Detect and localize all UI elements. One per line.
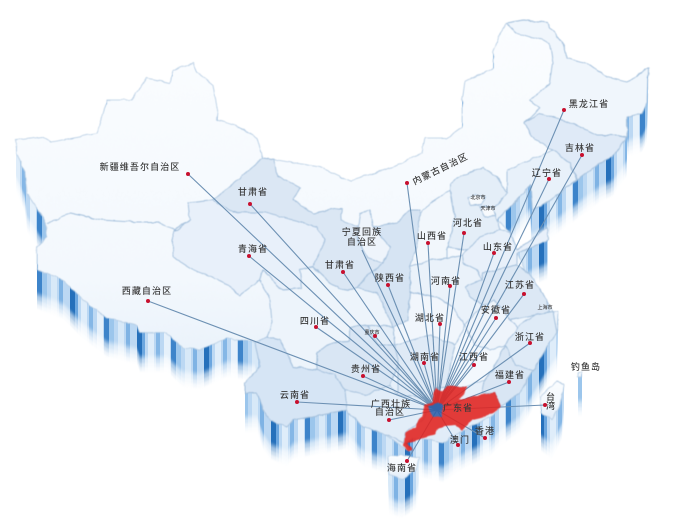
- Shaanxi: 陕西省: [375, 272, 405, 283]
- Shanxi: [417, 230, 447, 245]
- Qinghai: [238, 243, 268, 258]
- Fujian: 福建省: [495, 369, 525, 380]
- Heilongjiang: [562, 98, 609, 112]
- map surface with provinces: [16, 20, 648, 479]
- Taiwan: 台: [546, 391, 556, 402]
- Yunnan: [280, 389, 310, 404]
- Sichuan: 四川省: [300, 315, 330, 326]
- Anhui: 安徽省: [481, 304, 511, 315]
- Diaoyu Islands: 钓鱼岛: [571, 361, 601, 372]
- Jiangxi: 江西省: [459, 351, 489, 362]
- land surface: [16, 20, 648, 479]
- Hebei: 河北省: [453, 217, 483, 228]
- Guangdong highlighted in red, lines showing faintly through: [403, 386, 501, 452]
- Gansu: [238, 186, 268, 206]
- Gansu second label: [325, 259, 355, 274]
- Beijing: 北京市: [470, 194, 486, 201]
- Taiwan: [543, 391, 556, 411]
- Hubei: 湖北省: [415, 312, 445, 323]
- Jiangsu: 江苏省: [505, 279, 535, 290]
- Jilin: [565, 142, 595, 157]
- Shandong: 山东省: [483, 241, 513, 252]
- Hainan: 海南省: [387, 462, 417, 473]
- Liaoning: 辽宁省: [532, 167, 562, 178]
- provinces: [47, 20, 648, 442]
- hub marker: [428, 403, 443, 417]
- Chongqing: 重庆市: [364, 329, 380, 336]
- Anhui: [481, 304, 511, 320]
- Guizhou: 贵州省: [351, 363, 381, 374]
- Fujian: [495, 369, 525, 384]
- Ningxia: 自治区: [347, 236, 377, 247]
- Hebei: [453, 217, 483, 235]
- Guangdong: 广东省: [443, 402, 473, 413]
- Xinjiang: [100, 161, 190, 176]
- Hong Kong: [475, 425, 495, 440]
- Inner Mongolia: 内蒙古自治区: [411, 150, 470, 187]
- Heilongjiang: 黑龙江省: [569, 98, 609, 109]
- Chongqing: [364, 329, 380, 338]
- Taiwan: 湾: [546, 400, 556, 411]
- Tianjin: 天津市: [480, 205, 496, 212]
- Guangxi: 自治区: [375, 406, 405, 417]
- Gansu second label: 甘肃省: [325, 259, 355, 270]
- Qinghai: 青海省: [238, 243, 268, 254]
- Shanxi: 山西省: [417, 230, 447, 241]
- Guangxi: 广西壮族: [371, 398, 411, 409]
- Guangxi: [371, 398, 411, 422]
- Gansu: 甘肃省: [238, 186, 268, 197]
- Macau: 澳门: [450, 434, 470, 445]
- Tibet: [122, 285, 172, 303]
- Guangdong shape: [403, 386, 501, 452]
- Zhejiang: 浙江省: [515, 331, 545, 342]
- Henan: 河南省: [431, 275, 461, 286]
- Guizhou: [351, 363, 381, 378]
- Xinjiang: 新疆维吾尔自治区: [100, 161, 180, 172]
- Hong Kong: 香港: [475, 425, 495, 436]
- Shaanxi: [375, 272, 405, 287]
- Ningxia: [342, 226, 382, 247]
- province labels and markers: [100, 98, 609, 473]
- Tibet: 西藏自治区: [122, 285, 172, 296]
- Ningxia: 宁夏回族: [342, 226, 382, 237]
- Jiangsu: [505, 279, 535, 296]
- Hunan: 湖南省: [410, 351, 440, 362]
- Shanghai: 上海市: [537, 304, 553, 311]
- connection lines to Guangdong: [148, 110, 582, 461]
- Jilin: 吉林省: [565, 142, 595, 153]
- Jiangxi: [459, 351, 489, 367]
- Yunnan: 云南省: [280, 389, 310, 400]
